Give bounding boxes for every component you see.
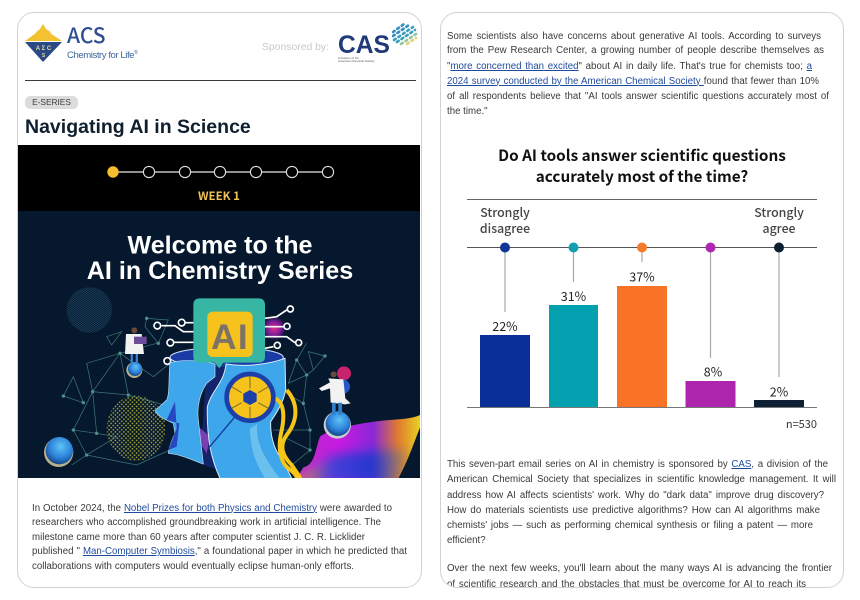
text: intro paragraph: milestone came more than 60 years after computer scientist J. C. R. Licklider (32, 532, 365, 542)
CAS logo: A division of the (338, 56, 359, 60)
value labels: 2% (770, 382, 789, 400)
circuit lines (154, 306, 302, 364)
text: series description: How do materials scientists use predictive algorithms? How can AI algorithms make (447, 504, 820, 516)
text: intro paragraph (32, 502, 407, 572)
dotted yellow circle (107, 396, 165, 461)
text: survey paragraph: of all respondents believe that "AI tools answer scientific questions accurately most of (447, 90, 829, 102)
scientist: right (319, 366, 351, 415)
head interior (200, 367, 233, 473)
head: back (207, 358, 292, 478)
scale end labels: Strongly (754, 203, 804, 221)
gear wheel (227, 374, 273, 421)
value labels: 37% (629, 266, 655, 286)
value labels: 22% (492, 316, 518, 335)
text: series description: American Chemical Society that specializes in scientific knowledge management. It will (447, 474, 836, 484)
text: closing paragraph (447, 562, 832, 588)
CAS logo: CAS (338, 32, 390, 59)
text: series description: chemists' jobs — such as performing chemical synthesis or filing a patent — more (447, 520, 813, 530)
ACS logo (25, 20, 138, 62)
text: survey paragraph: Some scientists also have concerns about generative AI tools. According to surveys (447, 30, 821, 42)
sample size: n=530 (786, 416, 817, 432)
scale end labels: agree (762, 219, 796, 237)
chart title (498, 144, 786, 187)
sponsored by label: Sponsored by: (262, 42, 329, 53)
text: intro paragraph: In October 2024, the Nobel Prizes for both Physics and Chemistry were awarded to (32, 502, 392, 514)
text: survey paragraph: from the Pew Research Center, a growing number of people describe themselves as (447, 45, 824, 56)
AI chip: AI (211, 318, 249, 357)
rainbow wave (300, 415, 420, 478)
text: survey paragraph: "more concerned than excited" about AI in daily life. That's true for chemists too; a (447, 60, 812, 72)
scale dots (500, 242, 784, 252)
chart: survey responses (467, 144, 817, 432)
CAS logo (338, 23, 418, 63)
panel: left email card (17, 12, 422, 588)
scale end labels (480, 203, 804, 237)
tag: E-SERIES (25, 96, 78, 109)
scale end labels: Strongly (480, 203, 530, 221)
heading: Navigating AI in Science: Navigating AI in Science (25, 116, 251, 138)
tag: E-SERIES: E-SERIES (32, 97, 71, 107)
text: intro paragraph: published " Man-Computer Symbiosis," a foundational paper in which he predicted that (32, 546, 407, 557)
head: face (155, 361, 215, 464)
ACS logo: S (42, 53, 46, 59)
text: closing paragraph: Over the next few weeks, you'll learn about the many ways AI is advancing the frontier (447, 562, 832, 574)
hero illustration (18, 211, 420, 478)
text: intro paragraph: researchers who accomplished groundbreaking work in artificial intelligence. The (32, 516, 381, 528)
CAS logo: American Chemical Society (338, 59, 375, 63)
AI chip (193, 298, 265, 368)
value labels: 31% (561, 286, 587, 305)
ACS logo: A Σ C (36, 46, 52, 52)
scientist: left (125, 327, 147, 364)
text: survey paragraph: the time." (447, 106, 488, 117)
value labels (492, 266, 789, 400)
molecular network (63, 318, 325, 467)
value labels: 8% (704, 362, 723, 380)
chart title: Do AI tools answer scientific questions (498, 144, 786, 166)
hero title: AI in Chemistry Series (87, 257, 353, 285)
text: series description (447, 458, 836, 546)
scale end labels: disagree (480, 219, 530, 237)
hero title: Welcome to the (128, 232, 313, 260)
spheres (44, 362, 351, 467)
bars (480, 286, 804, 407)
text: series description: address how AI affects scientists' work. Why do "dark data" improve drug discovery? (447, 490, 824, 500)
chart title: accurately most of the time? (536, 165, 748, 187)
leader lines (505, 247, 779, 377)
panel: right email card (440, 12, 844, 588)
progress band (18, 145, 420, 211)
head opening (170, 347, 283, 367)
text: intro paragraph: collaborations with computers would eventually eclipse human-only efforts. (32, 560, 354, 572)
progress band: WEEK 1 (198, 188, 240, 204)
text: series description: This seven-part email series on AI in chemistry is sponsored by CAS, a division of the (447, 458, 828, 470)
text: survey paragraph (447, 30, 829, 117)
text: survey paragraph: 2024 survey conducted by the American Chemical Society found that fewer than 10% (447, 76, 819, 86)
yellow cables (272, 390, 301, 478)
ACS logo: ACS (67, 20, 106, 50)
ACS logo: Chemistry for Life® (67, 50, 137, 61)
hero title (87, 232, 353, 285)
text: series description: efficient? (447, 534, 486, 546)
hatched circle (67, 287, 112, 333)
purple glow (262, 316, 286, 340)
